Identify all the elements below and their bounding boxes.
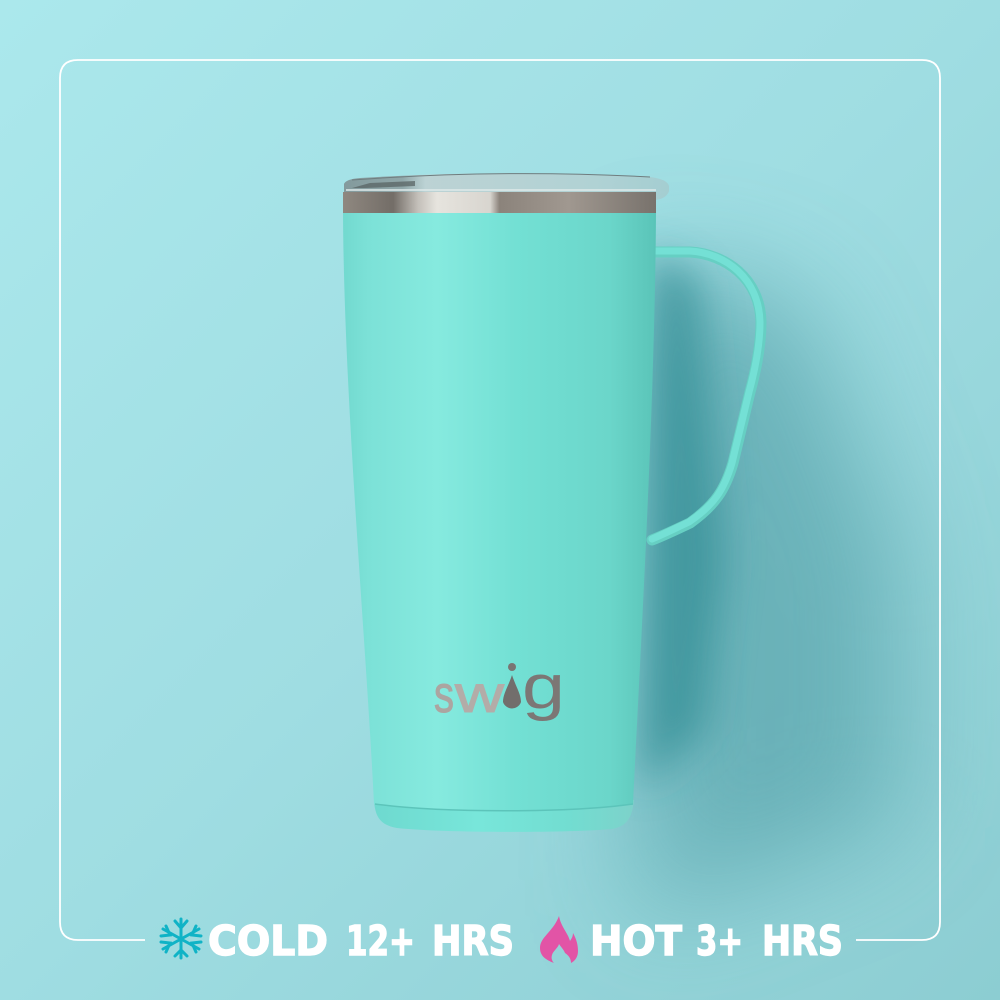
mug	[343, 173, 761, 832]
lid highlight	[346, 189, 656, 191]
mug body	[343, 212, 656, 812]
logo letter g: g	[522, 653, 565, 722]
mug shadow	[640, 250, 900, 920]
label: hot: HRS	[762, 917, 843, 965]
icon: snowflake	[161, 919, 201, 958]
base seam line	[375, 804, 633, 811]
label: cold	[208, 917, 514, 965]
label: cold: 12+	[346, 917, 415, 965]
label: hot	[590, 917, 843, 965]
clear lid	[344, 173, 669, 200]
mug handle	[652, 251, 761, 540]
label: cold: COLD	[208, 917, 328, 965]
metal rim	[343, 192, 656, 213]
logo letter w: w	[454, 666, 505, 724]
swig logo	[434, 653, 565, 724]
label: cold: HRS	[432, 917, 514, 965]
white rounded frame	[60, 60, 940, 940]
bottom hold-time labels	[161, 916, 843, 965]
icon: flame	[540, 916, 578, 963]
label: hot: HOT	[590, 917, 682, 965]
logo letter s: s	[434, 666, 454, 724]
label: hot: 3+	[696, 917, 743, 965]
lid top edge	[352, 174, 650, 180]
mug base	[374, 800, 634, 832]
lid reflections	[352, 181, 415, 188]
logo droplet	[503, 663, 521, 708]
